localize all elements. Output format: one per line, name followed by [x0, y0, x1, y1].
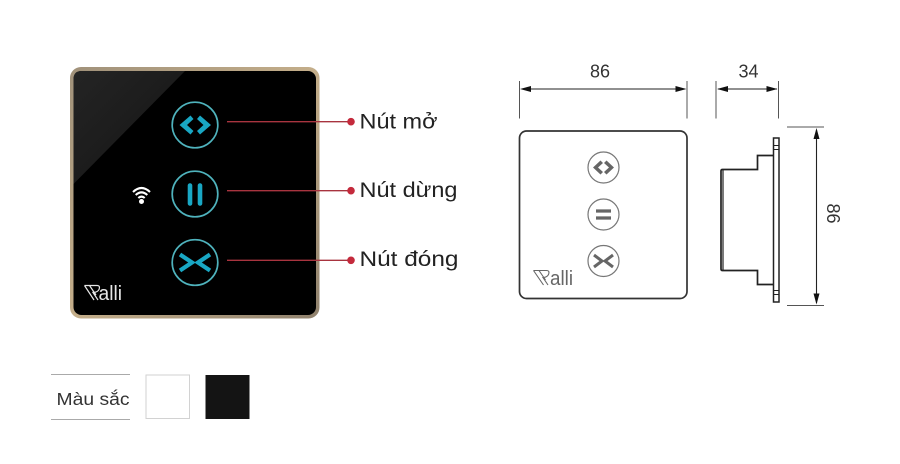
logo: Ralli grey: alli	[550, 268, 573, 290]
panel: front view drawing	[520, 131, 687, 298]
label: colours: Màu sắc	[56, 388, 130, 409]
panel: black touch switch	[70, 67, 320, 318]
dimension: height 86	[787, 127, 843, 306]
dimension: front width 86: 86	[590, 62, 610, 82]
dimension: front width 86	[520, 62, 687, 118]
callout line: open	[227, 118, 355, 125]
label: stop button: Nút dừng	[360, 179, 458, 202]
icon: close outline	[588, 246, 619, 276]
callout line: stop	[227, 187, 355, 194]
icon: stop outline	[588, 199, 619, 230]
dimension: depth 34	[716, 62, 778, 118]
side view drawing	[721, 138, 779, 302]
logo: Ralli white: alli	[98, 283, 122, 305]
colour legend	[51, 374, 250, 420]
callout line: close	[227, 256, 355, 264]
icon: wifi	[133, 188, 150, 204]
swatch: white	[146, 375, 190, 418]
dimension: height 86: 86	[823, 203, 843, 224]
icon: open outline	[588, 152, 619, 183]
label: open button: Nút mở	[360, 110, 438, 134]
icon: close button	[172, 240, 218, 285]
swatch: black	[206, 375, 250, 419]
icon: open button	[172, 102, 218, 148]
label: close button: Nút đóng	[360, 248, 458, 271]
icon: pause button	[172, 171, 218, 217]
dimension: depth 34: 34	[738, 62, 759, 82]
logo: Ralli white	[84, 283, 122, 305]
glass reflection	[74, 71, 185, 184]
logo: Ralli grey	[534, 268, 573, 290]
